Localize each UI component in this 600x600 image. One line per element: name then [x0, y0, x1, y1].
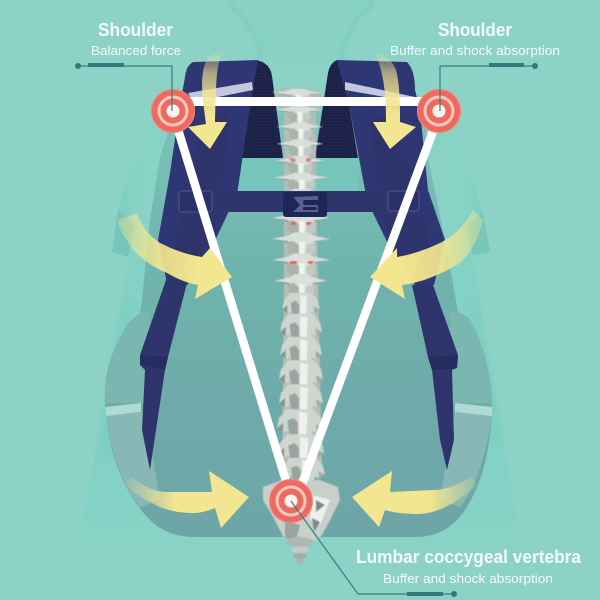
white force triangle	[172, 102, 439, 500]
chest strap band	[212, 191, 388, 212]
callout line: left shoulder	[75, 63, 172, 111]
sleeve corner left	[112, 210, 135, 257]
arrow: middle right	[370, 210, 483, 299]
arrow: top right	[373, 53, 416, 149]
lumbar heading: Lumbar coccygeal vertebra	[356, 547, 582, 567]
arrow: bottom left	[123, 471, 249, 528]
chest strap and buckle	[179, 191, 419, 217]
buckle	[283, 192, 327, 217]
right shoulder heading: Shoulder	[438, 20, 512, 40]
arrow: bottom right	[352, 471, 478, 527]
lower side right	[440, 412, 491, 507]
sleeve corner right	[466, 213, 490, 255]
lumbar description: Buffer and shock absorption	[383, 571, 553, 586]
reflective stripe right	[455, 403, 492, 416]
disc accents	[290, 222, 314, 264]
callout line: lumbar	[291, 501, 457, 597]
right adjuster	[388, 191, 419, 211]
target: right shoulder	[417, 89, 461, 133]
target: left shoulder	[151, 89, 195, 133]
arrow: top left	[188, 52, 227, 149]
torso silhouette	[63, 100, 538, 566]
coccyx	[287, 537, 313, 547]
side mesh left	[105, 313, 150, 403]
left shoulder heading: Shoulder	[98, 20, 173, 40]
callout line: right shoulder	[440, 63, 538, 111]
right shoulder description: Buffer and shock absorption	[390, 43, 560, 58]
arrow: middle left	[118, 213, 232, 299]
backpack body	[105, 110, 492, 537]
target: lumbar	[269, 479, 313, 523]
right shoulder strap	[315, 60, 458, 470]
reflective stripe left	[105, 403, 141, 416]
upper back panel	[237, 157, 359, 193]
left shoulder strap	[140, 60, 283, 470]
lower side left	[106, 412, 160, 507]
left adjuster	[179, 191, 212, 212]
side mesh right	[450, 312, 492, 403]
left shoulder description: Balanced force	[91, 43, 181, 58]
sacrum	[263, 480, 340, 540]
head and neck silhouette	[227, 0, 375, 62]
mesh texture	[105, 215, 492, 420]
spine	[263, 87, 340, 565]
